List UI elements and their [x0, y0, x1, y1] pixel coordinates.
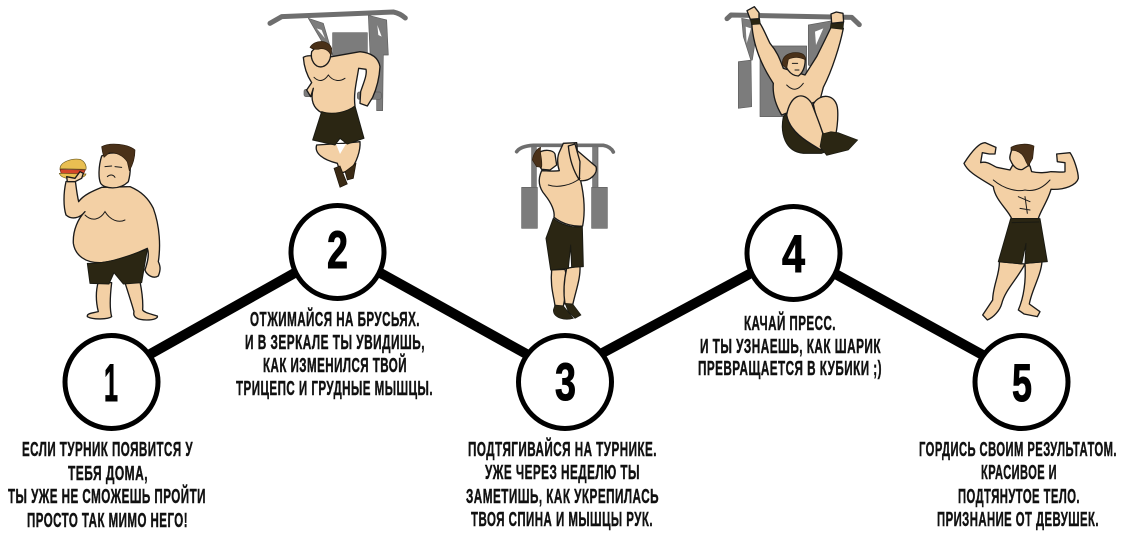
text block 1: ТЕБЯ ДОМА,: [68, 463, 148, 485]
text block 3: ЗАМЕТИШЬ, КАК УКРЕПИЛАСЬ: [466, 486, 659, 508]
connecting zigzag line: [145, 270, 990, 359]
text block 4: И ТЫ УЗНАЕШЬ, КАК ШАРИК: [700, 336, 881, 358]
text block 2: ОТЖИМАЙСЯ НА БРУСЬЯХ.: [250, 307, 420, 331]
figure 5: muscular man flexing: [964, 143, 1078, 320]
text block 4: [698, 311, 882, 380]
step 2 circle: 2: [327, 221, 348, 280]
step 4 circle: [747, 206, 840, 300]
figure 4: man doing hanging knee raises: [727, 7, 859, 155]
step 1 circle: [65, 336, 158, 428]
text block 4: ПРЕВРАЩАЕТСЯ В КУБИКИ ;): [698, 358, 882, 380]
text block 1: ПРОСТО ТАК МИМО НЕГО!: [27, 510, 188, 532]
text block 2: КАК ИЗМЕНИЛСЯ ТВОЙ: [263, 353, 407, 377]
figure 3: man doing pull-ups: [517, 143, 613, 319]
step 5 circle: [975, 336, 1068, 428]
step 3 circle: 3: [555, 353, 576, 412]
figure 2: man on dip bars: [270, 12, 405, 187]
text block 1: ТЫ УЖЕ НЕ СМОЖЕШЬ ПРОЙТИ: [8, 484, 206, 508]
text block 2: [236, 307, 433, 400]
text block 4: КАЧАЙ ПРЕСС.: [744, 311, 836, 335]
text block 5: КРАСИВОЕ И: [981, 462, 1057, 484]
text block 3: ТВОЯ СПИНА И МЫШЦЫ РУК.: [471, 509, 653, 531]
text block 5: [919, 439, 1117, 531]
text block 3: УЖЕ ЧЕРЕЗ НЕДЕЛЮ ТЫ: [485, 462, 640, 484]
step 2 circle: [291, 206, 384, 298]
text block 3: ПОДТЯГИВАЙСЯ НА ТУРНИКЕ.: [468, 437, 657, 461]
figure 1: fat man with burger: [59, 144, 160, 320]
text block 1: ЕСЛИ ТУРНИК ПОЯВИТСЯ У: [22, 439, 193, 461]
step 5 circle: 5: [1012, 354, 1032, 413]
step 1 circle: 1: [104, 354, 118, 413]
step 4 circle: 4: [782, 225, 805, 284]
text block 3: [466, 437, 659, 531]
step 3 circle: [518, 336, 612, 428]
text block 2: И В ЗЕРКАЛЕ ТЫ УВИДИШЬ,: [245, 332, 425, 354]
text block 1: [8, 439, 206, 532]
text block 2: ТРИЦЕПС И ГРУДНЫЕ МЫШЦЫ.: [236, 378, 433, 400]
